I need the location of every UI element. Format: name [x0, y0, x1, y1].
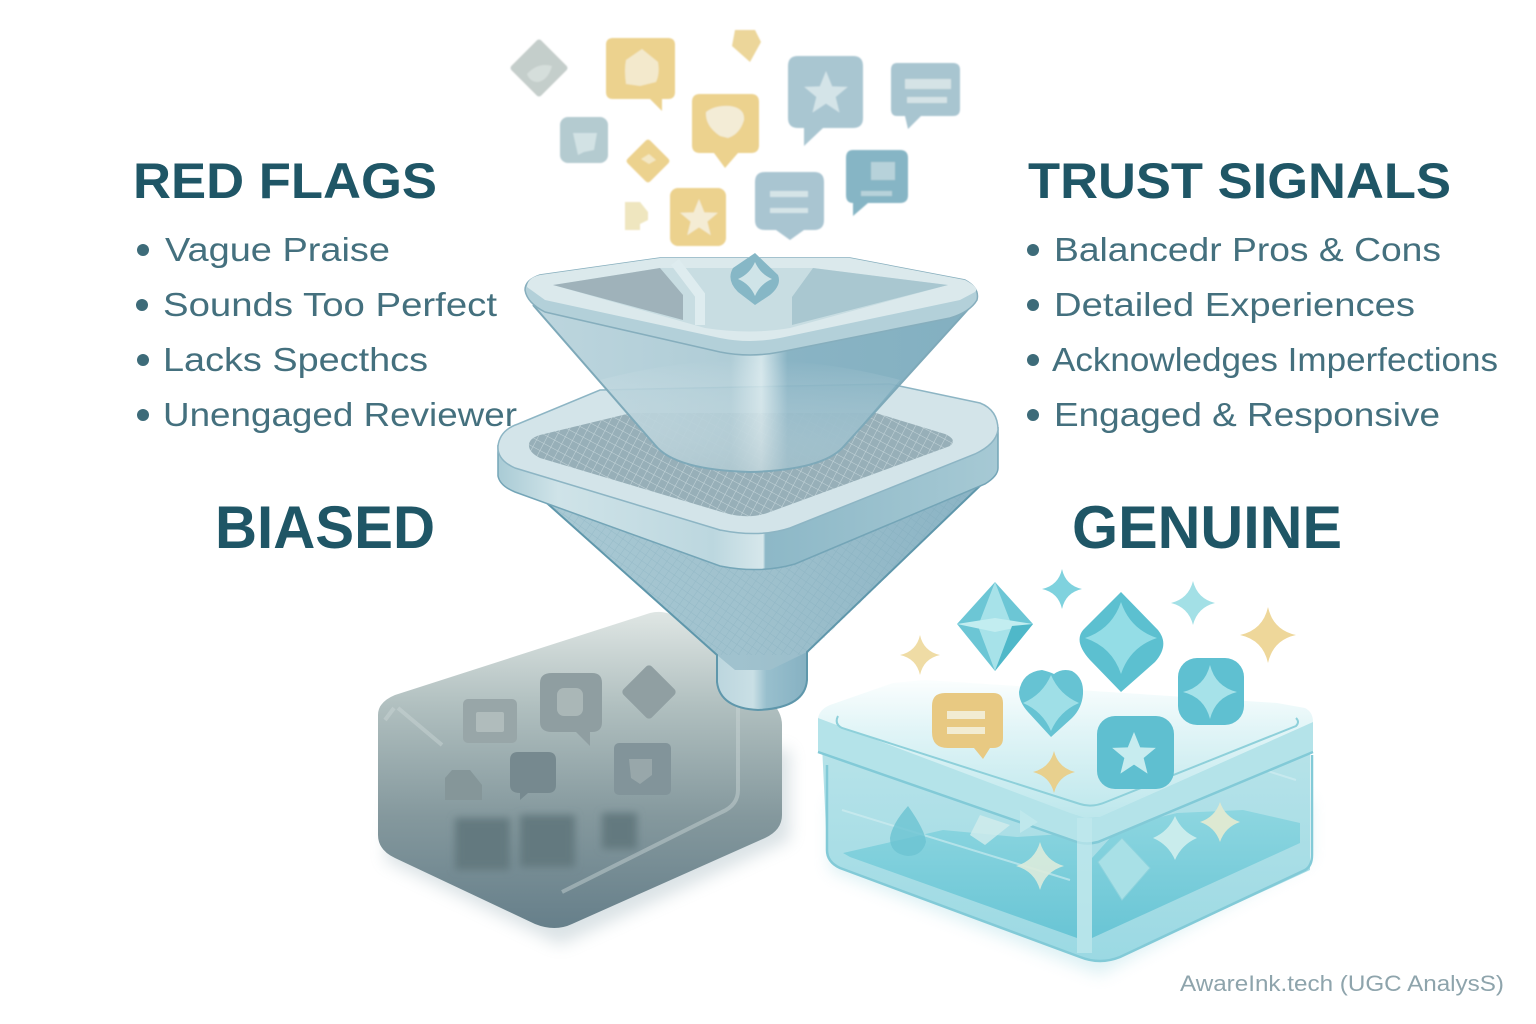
icon: yellow diamond [625, 138, 671, 184]
icon: yellow sparkle left [900, 635, 940, 675]
funnel cone [530, 482, 984, 710]
biased grey container [378, 612, 790, 945]
icon: grey-blue square [560, 117, 608, 163]
items inside box [890, 802, 1240, 900]
icon: yellow chat bubble [932, 693, 1003, 759]
icon: text bubble [755, 172, 824, 240]
upper funnel [525, 253, 978, 472]
list: trust signals: Balancedr Pros & Cons [1054, 231, 1441, 268]
upper funnel cone [533, 305, 972, 472]
funnel mouth [553, 262, 948, 332]
icon: yellow sparkle right [1240, 607, 1296, 663]
grey icon: square [463, 699, 517, 743]
lower mesh funnel [498, 384, 998, 710]
falling review icons [509, 30, 960, 246]
grey icon: bubble [540, 673, 602, 746]
grey icon: small bubble [510, 752, 556, 800]
mesh screen [529, 413, 953, 516]
list: red flags: Vague Praise [165, 231, 390, 268]
icon: heart gem [1019, 670, 1083, 737]
icon: faceted gem [957, 582, 1033, 671]
container body [822, 745, 1310, 961]
box lid [818, 680, 1313, 818]
box front corner [1077, 818, 1092, 953]
list: trust signals: Detailed Experiences [1054, 286, 1415, 323]
list: trust signals: Engaged & Responsive [1054, 396, 1440, 433]
grey icon: diamond [621, 664, 677, 720]
funnel rim band [498, 428, 998, 570]
icon: blue text bubble [891, 63, 960, 129]
upper funnel rim [525, 258, 978, 355]
grey icon: faint shape [445, 770, 482, 800]
label: genuine: GENUINE [1072, 494, 1342, 561]
list: trust signals: Acknowledges Imperfections [1052, 341, 1498, 378]
icon: blue gem entering funnel [730, 253, 779, 305]
icon: star square [1097, 716, 1174, 789]
list: red flags: Sounds Too Perfect [163, 286, 497, 323]
icon: pale sparkle [1171, 581, 1215, 625]
icon: blue star bubble [788, 56, 863, 146]
icon: yellow sparkle center [1033, 751, 1075, 793]
label: biased: BIASED [215, 494, 435, 561]
icon: dark blue bubble [846, 150, 908, 216]
icon: large gem [1080, 592, 1163, 692]
list: red flags: Lacks Specthcs [163, 341, 428, 378]
icon: sparkle square [1178, 658, 1244, 725]
icon: yellow heart bubble [692, 94, 759, 168]
grey icon: square bubble [614, 743, 671, 795]
gems above container [900, 569, 1296, 793]
genuine cyan container [818, 680, 1313, 975]
grey icon: dark blocks [455, 813, 637, 870]
icon: pale yellow shape [625, 202, 648, 230]
list: trust signals [1027, 231, 1498, 433]
icon: grey diamond [509, 38, 569, 98]
icon: sparkle [1042, 569, 1082, 609]
list: red flags: Unengaged Reviewer [163, 396, 517, 433]
heading: red flags: RED FLAGS [133, 153, 437, 209]
icon: yellow star square [670, 188, 726, 246]
list: red flags [136, 231, 517, 433]
heading: trust signals: TRUST SIGNALS [1028, 153, 1451, 209]
water [843, 810, 1300, 938]
funnel rim top [498, 384, 998, 534]
footer credit: AwareInk.tech (UGC AnalysS) [1180, 971, 1504, 996]
icon: small yellow gem [732, 30, 761, 62]
icon: yellow bubble with gem [606, 38, 675, 111]
